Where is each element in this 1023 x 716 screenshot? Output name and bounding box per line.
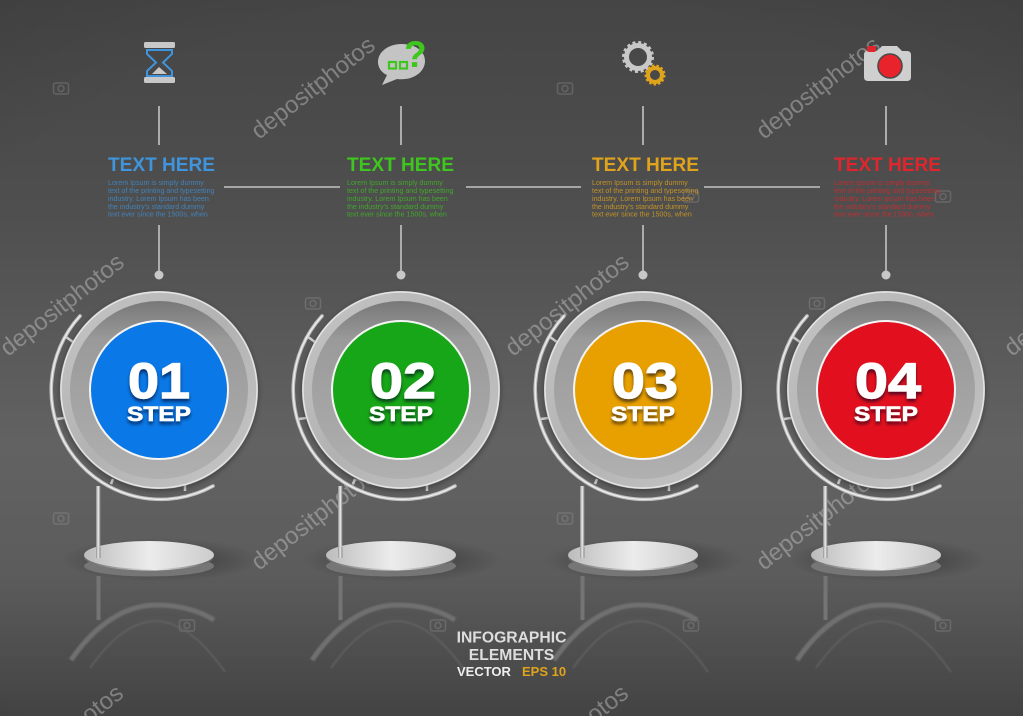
text block: step 3: the industry's standard dummy [592,203,689,211]
text block: step 2: industry. Lorem Ipsum has been [347,195,448,203]
icon: speech bubble with question mark [378,34,427,85]
text block: step 3: industry. Lorem Ipsum has been [592,195,693,203]
panel: step 1 globe: 01 [128,353,190,409]
caption [457,630,566,679]
text block: step 4: TEXT HERE [834,155,941,176]
text block: step 1: the industry's standard dummy [108,203,205,211]
text block: step 4: industry. Lorem Ipsum has been [834,195,935,203]
text block: step 1: industry. Lorem Ipsum has been [108,195,209,203]
connector lines [159,106,886,272]
panel: step 4 globe [778,291,987,672]
caption: EPS 10 [522,664,566,679]
connector dots [154,270,890,280]
text block: step 2 [347,155,454,218]
text block: step 3: Lorem Ipsum is simply dummy [592,179,688,187]
icon: speech bubble with question mark: ? [404,34,427,75]
text block: step 3 [592,155,699,218]
panel: step 1 globe: STEP [127,403,191,426]
watermarks: depositphotos [751,462,885,576]
caption: ELEMENTS [469,647,554,664]
text block: step 1: text ever since the 1500s, when [108,210,208,218]
text block: step 4 [834,155,941,218]
panel: step 4 globe: 04 [855,353,921,409]
panel: step 4 globe: STEP [854,403,918,426]
text block: step 2: Lorem Ipsum is simply dummy [347,179,443,187]
text block: step 2: text ever since the 1500s, when [347,210,447,218]
watermarks: depositphotos [246,31,380,145]
watermarks: depositphotos [751,31,885,145]
text block: step 4: text ever since the 1500s, when [834,210,934,218]
text block: step 2: the industry's standard dummy [347,203,444,211]
watermarks: depositphotos [500,248,634,362]
text block: step 4: text of the printing and typesetting [834,187,941,195]
text block: step 2: TEXT HERE [347,155,454,176]
panel: step 3 globe: STEP [611,403,675,426]
watermarks: depositphotos [246,462,380,576]
text block: step 3: text ever since the 1500s, when [592,210,692,218]
panel: step 3 globe: 03 [612,353,678,409]
panel: step 1 globe [51,291,260,672]
watermark camera marks [54,83,950,631]
text block: step 1: TEXT HERE [108,155,215,176]
icon: hourglass [144,42,175,83]
text block: step 2: text of the printing and typesetting [347,187,454,195]
panel: step 2 globe: 02 [370,353,436,409]
panel: step 3 globe [535,291,744,672]
text block: step 1: text of the printing and typesetting [108,187,215,195]
panel: step 2 globe [293,291,502,672]
caption: INFOGRAPHIC [457,630,566,646]
text block: step 4: Lorem Ipsum is simply dummy [834,179,930,187]
icon: gears [624,42,664,84]
text block: step 4: the industry's standard dummy [834,203,931,211]
text block: step 3: TEXT HERE [592,155,699,176]
text block: step 1 [108,155,215,218]
caption: VECTOR [457,664,512,679]
text block: step 1: Lorem Ipsum is simply dummy [108,179,204,187]
text block: step 3: text of the printing and typesetting [592,187,699,195]
icon: camera [864,46,911,81]
panel: step 2 globe: STEP [369,403,433,426]
